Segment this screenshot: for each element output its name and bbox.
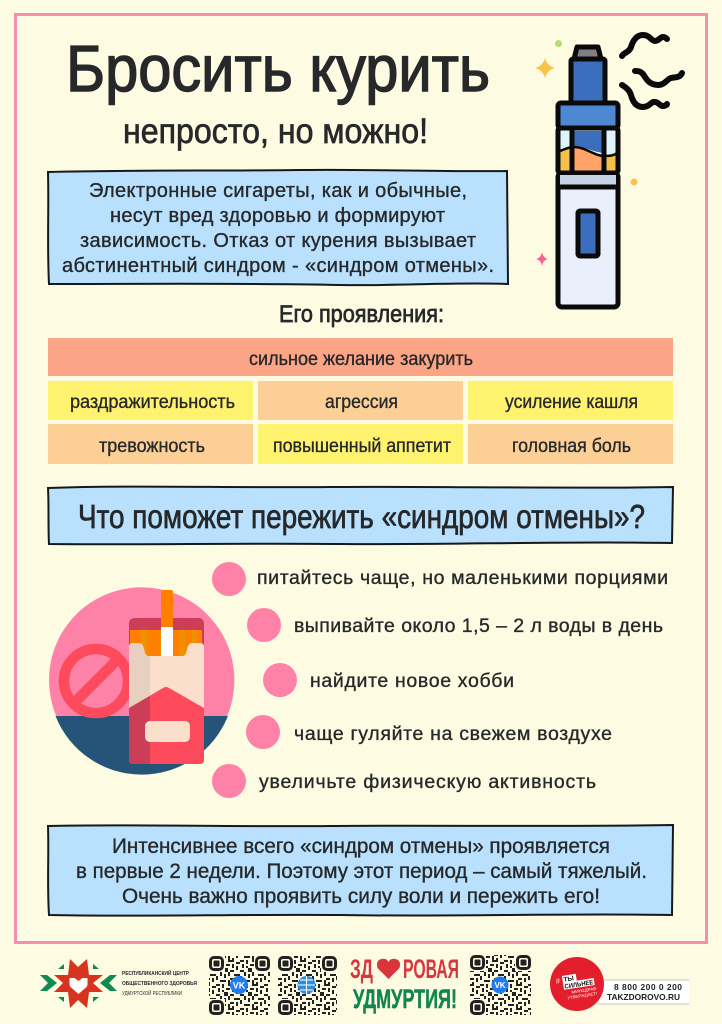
tip 2: выпивайте около 1,5 – 2 л воды в день: [294, 615, 663, 637]
intro text: абстинентный синдром - «синдром отмены».: [62, 255, 494, 277]
tip 4: [246, 715, 612, 749]
table: symptoms: усиление кашля: [505, 391, 638, 413]
badge: you are stronger hotline: 8 800 200 0 200: [614, 982, 682, 992]
table: symptoms: [48, 338, 673, 464]
icon: vape device: [558, 47, 618, 307]
conclusion text: в первые 2 недели. Поэтому этот период – самый тяжелый.: [76, 860, 647, 883]
QR code: website: [277, 955, 338, 1016]
logo text: РЕСПУБЛИКАНСКИЙ ЦЕНТР: [122, 969, 189, 977]
QR code: VK second: [469, 954, 532, 1016]
intro text: Электронные сигареты, как и обычные,: [89, 180, 467, 202]
badge: you are stronger hotline: УТВЕРЖДАЕТ!: [567, 991, 597, 1000]
title: Бросить курить: [66, 32, 490, 105]
conclusion text: Очень важно проявить силу воли и пережить его!: [122, 885, 600, 908]
logo text: УДМУРТСКОЙ РЕСПУБЛИКИ: [122, 989, 182, 997]
badge: you are stronger hotline: СИЛЬНЕЕ: [564, 979, 594, 991]
tip 1: питайтесь чаще, но маленькими порциями: [257, 567, 668, 589]
tip 5: [212, 764, 596, 798]
intro text: зависимость. Отказ от курения вызывает: [80, 230, 476, 252]
table: symptoms: головная боль: [512, 435, 631, 457]
table: symptoms: сильное желание закурить: [249, 348, 473, 370]
table: symptoms: агрессия: [325, 391, 398, 413]
logo: public health center: [40, 959, 197, 1008]
badge: you are stronger hotline: TAKZDOROVO.RU: [607, 992, 680, 1002]
subtitle: непросто, но можно!: [123, 112, 428, 151]
intro text: несут вред здоровью и формируют: [110, 205, 445, 227]
tip 2: [247, 608, 663, 642]
badge: you are stronger hotline: #: [555, 976, 561, 986]
tip 3: найдите новое хобби: [310, 670, 514, 692]
conclusion text: [76, 835, 647, 908]
panel: help heading: [48, 487, 673, 544]
logo: healthy Udmurtia: ЗД: [350, 954, 373, 984]
intro text: [62, 180, 494, 277]
logo: healthy Udmurtia: [350, 954, 459, 1014]
tip 1: [212, 562, 668, 596]
panel: intro: [48, 170, 508, 285]
QR code: VK: [208, 955, 271, 1016]
tip 5: увеличьте физическую активность: [259, 771, 596, 793]
icon: smoke: [622, 35, 682, 107]
panel: conclusion: [48, 825, 673, 916]
logo: healthy Udmurtia: РОВАЯ: [403, 954, 459, 984]
badge: you are stronger hotline: ТЫ: [563, 975, 574, 984]
logo: healthy Udmurtia: УДМУРТИЯ!: [353, 984, 457, 1014]
badge: you are stronger hotline: МИНЗДРАВ: [571, 986, 597, 995]
icon: sparkles: [535, 40, 638, 266]
table: symptoms: повышенный аппетит: [273, 435, 451, 457]
table: symptoms: тревожность: [99, 435, 205, 457]
illustration: cigarette pack: [49, 587, 234, 775]
tip 4: чаще гуляйте на свежем воздухе: [294, 723, 612, 745]
heading: symptoms: Его проявления:: [279, 301, 444, 328]
logo text: ОБЩЕСТВЕННОГО ЗДОРОВЬЯ: [122, 981, 197, 987]
logo text: [122, 969, 197, 997]
QR code: VK second: VK: [494, 981, 506, 990]
tip 3: [263, 663, 514, 697]
table: symptoms: раздражительность: [70, 391, 235, 413]
badge: you are stronger hotline: [550, 957, 689, 1011]
QR code: VK: VK: [233, 980, 246, 990]
conclusion text: Интенсивнее всего «синдром отмены» проявляется: [112, 835, 610, 858]
